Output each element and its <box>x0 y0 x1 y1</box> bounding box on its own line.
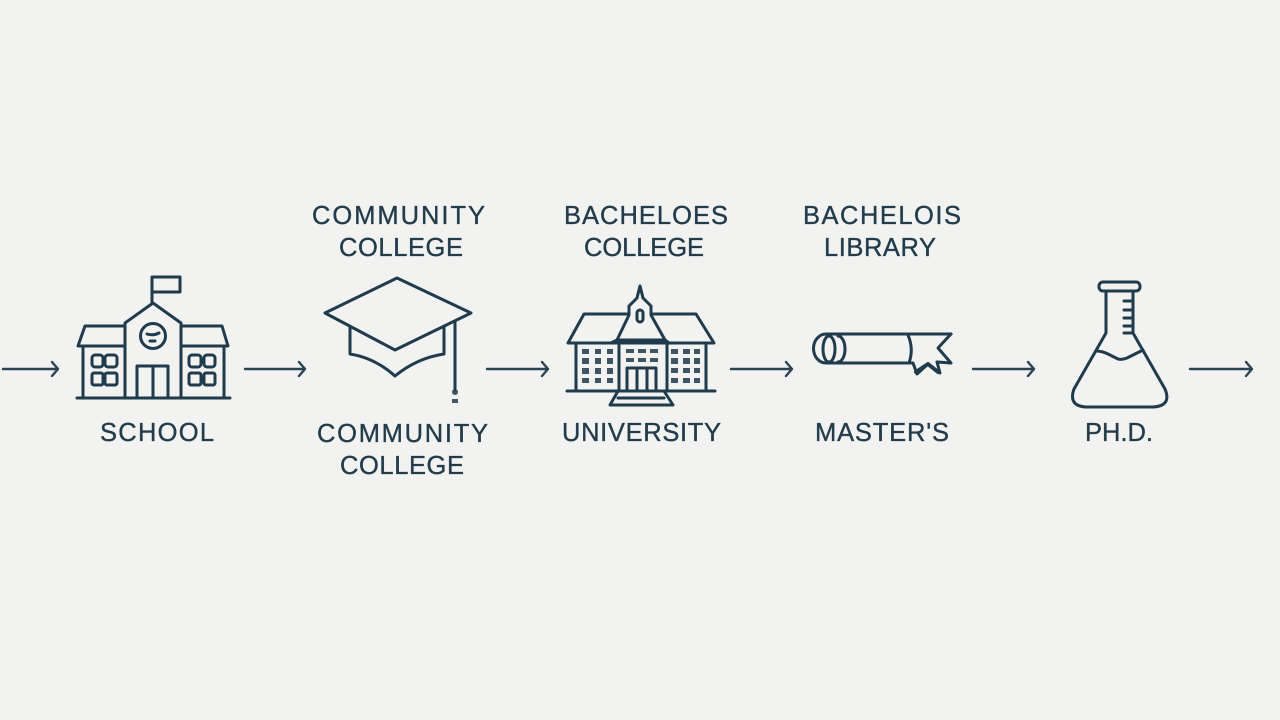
heading: community college top: COLLEGE <box>339 234 463 262</box>
heading: bachelois library: BACHELOIS <box>803 202 961 230</box>
arrow: master's to ph.d. <box>973 362 1034 376</box>
heading: bacheloes college: COLLEGE <box>584 234 704 262</box>
label: community college bottom <box>317 420 488 480</box>
icon: school <box>77 277 230 398</box>
heading: bachelois library: LIBRARY <box>824 234 936 262</box>
arrow: university to master's <box>731 362 792 376</box>
label: master's: MASTER'S <box>815 419 949 447</box>
arrow: community college to university <box>487 362 548 376</box>
icon: university building <box>567 286 715 405</box>
heading: bachelois library <box>803 202 961 262</box>
heading: bacheloes college: BACHELOES <box>564 202 728 230</box>
arrow: entry to school <box>3 362 58 376</box>
label: community college bottom: COMMUNITY <box>317 420 488 448</box>
arrow: exit from ph.d. <box>1190 362 1252 376</box>
label: community college bottom: COLLEGE <box>340 452 464 480</box>
label: ph.d.: PH.D. <box>1085 419 1153 447</box>
heading: community college top: COMMUNITY <box>312 202 485 230</box>
heading: community college top <box>312 202 485 262</box>
icon: flask <box>1072 282 1167 407</box>
heading: bacheloes college <box>564 202 728 262</box>
label: university: UNIVERSITY <box>562 419 721 447</box>
icon: graduation cap <box>325 278 471 403</box>
arrow: school to community college <box>245 362 305 376</box>
icon: diploma scroll <box>814 334 951 374</box>
label: school: SCHOOL <box>100 419 214 447</box>
